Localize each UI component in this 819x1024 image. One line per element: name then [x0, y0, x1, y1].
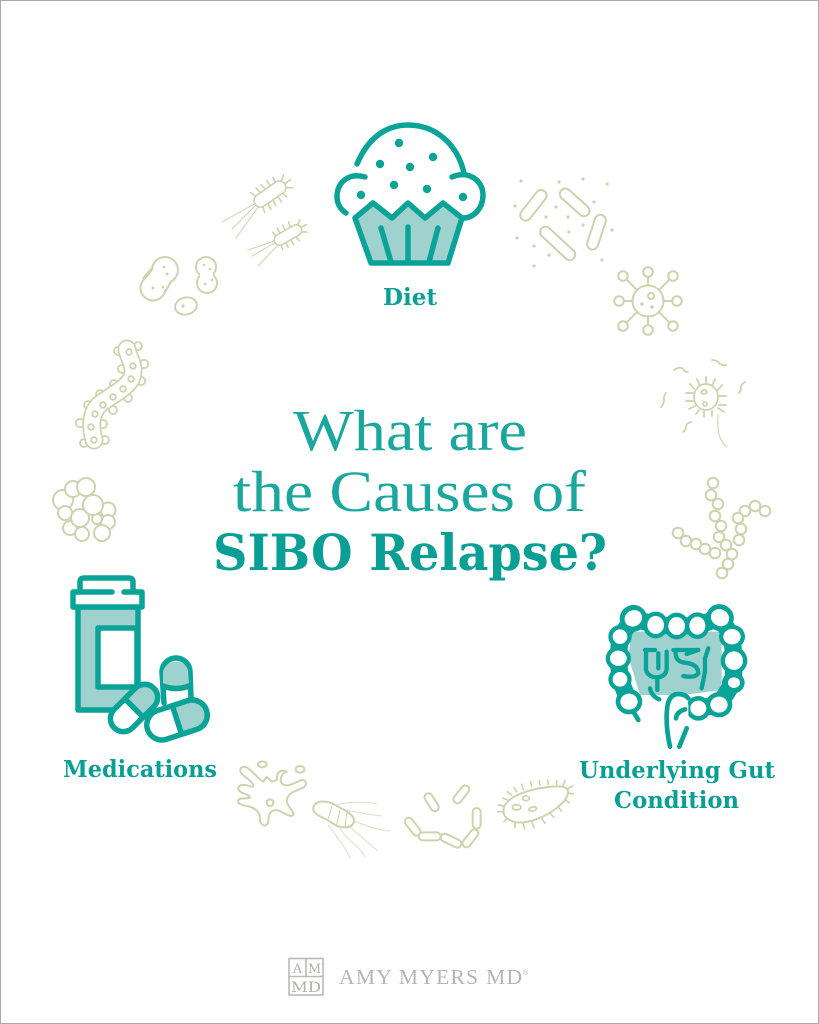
label: Diet: Diet — [383, 284, 437, 311]
title: the Causes of — [233, 459, 587, 524]
icon: muffin — [337, 125, 483, 263]
logo: MD — [291, 980, 321, 996]
icon: intestine — [606, 599, 747, 747]
icon: rod chain — [403, 784, 481, 849]
icon: rod bacteria with dots — [513, 177, 614, 268]
label: Underlying Gut Condition: Underlying Gut — [579, 757, 775, 784]
icon: cell cluster — [53, 478, 116, 541]
icon: amoeba — [238, 761, 306, 825]
icon: bacteria with flagella — [222, 169, 312, 266]
icon: beaded rod bacterium — [76, 342, 148, 447]
label: Underlying Gut Condition: Condition — [614, 787, 739, 814]
logo: ® — [523, 969, 529, 977]
icon: ciliated protozoan with squiggles — [661, 360, 745, 447]
icon: paramecium — [498, 780, 573, 829]
icon: medication bottle and pills — [73, 578, 211, 744]
title: SIBO Relapse? — [213, 523, 607, 582]
icon: diplococci — [140, 256, 218, 318]
logo: AMY MYERS MD — [339, 965, 522, 989]
logo: M — [308, 962, 321, 977]
title: What are — [293, 398, 527, 463]
icon: cocci chains — [673, 478, 770, 578]
logo — [289, 958, 529, 996]
label: Medications: Medications — [63, 756, 217, 783]
icon: virus — [614, 267, 682, 335]
icon: flagellate — [313, 801, 390, 858]
title — [213, 398, 607, 582]
label: Underlying Gut Condition — [579, 757, 775, 814]
logo: A — [292, 962, 303, 977]
